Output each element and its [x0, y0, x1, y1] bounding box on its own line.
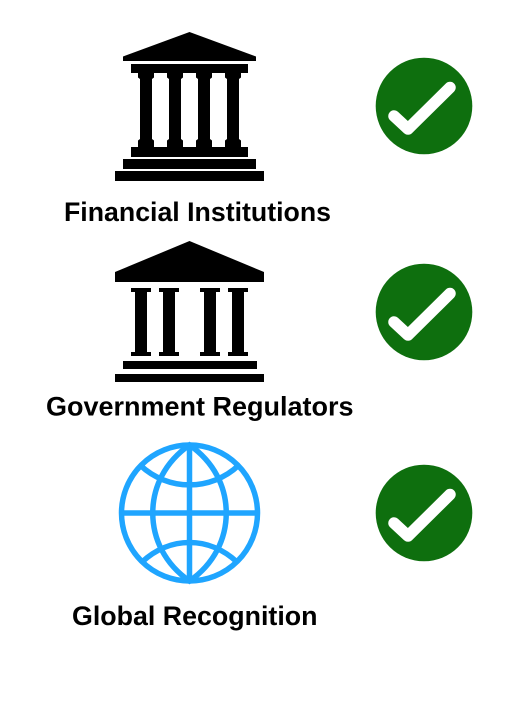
heading: Global Recognition: Global Recognition — [72, 601, 318, 631]
heading: Government Regulators: Government Regulators — [46, 392, 353, 422]
icon: bank building government regulators — [115, 241, 264, 382]
icon: green check badge 3 — [376, 465, 472, 561]
icon: green check badge 2 — [376, 264, 472, 360]
heading: Financial Institutions: Financial Institutions — [64, 197, 331, 227]
icon: green check badge 1 — [376, 58, 472, 154]
icon: blue globe — [122, 445, 258, 581]
icon: bank building financial institutions — [115, 32, 264, 181]
